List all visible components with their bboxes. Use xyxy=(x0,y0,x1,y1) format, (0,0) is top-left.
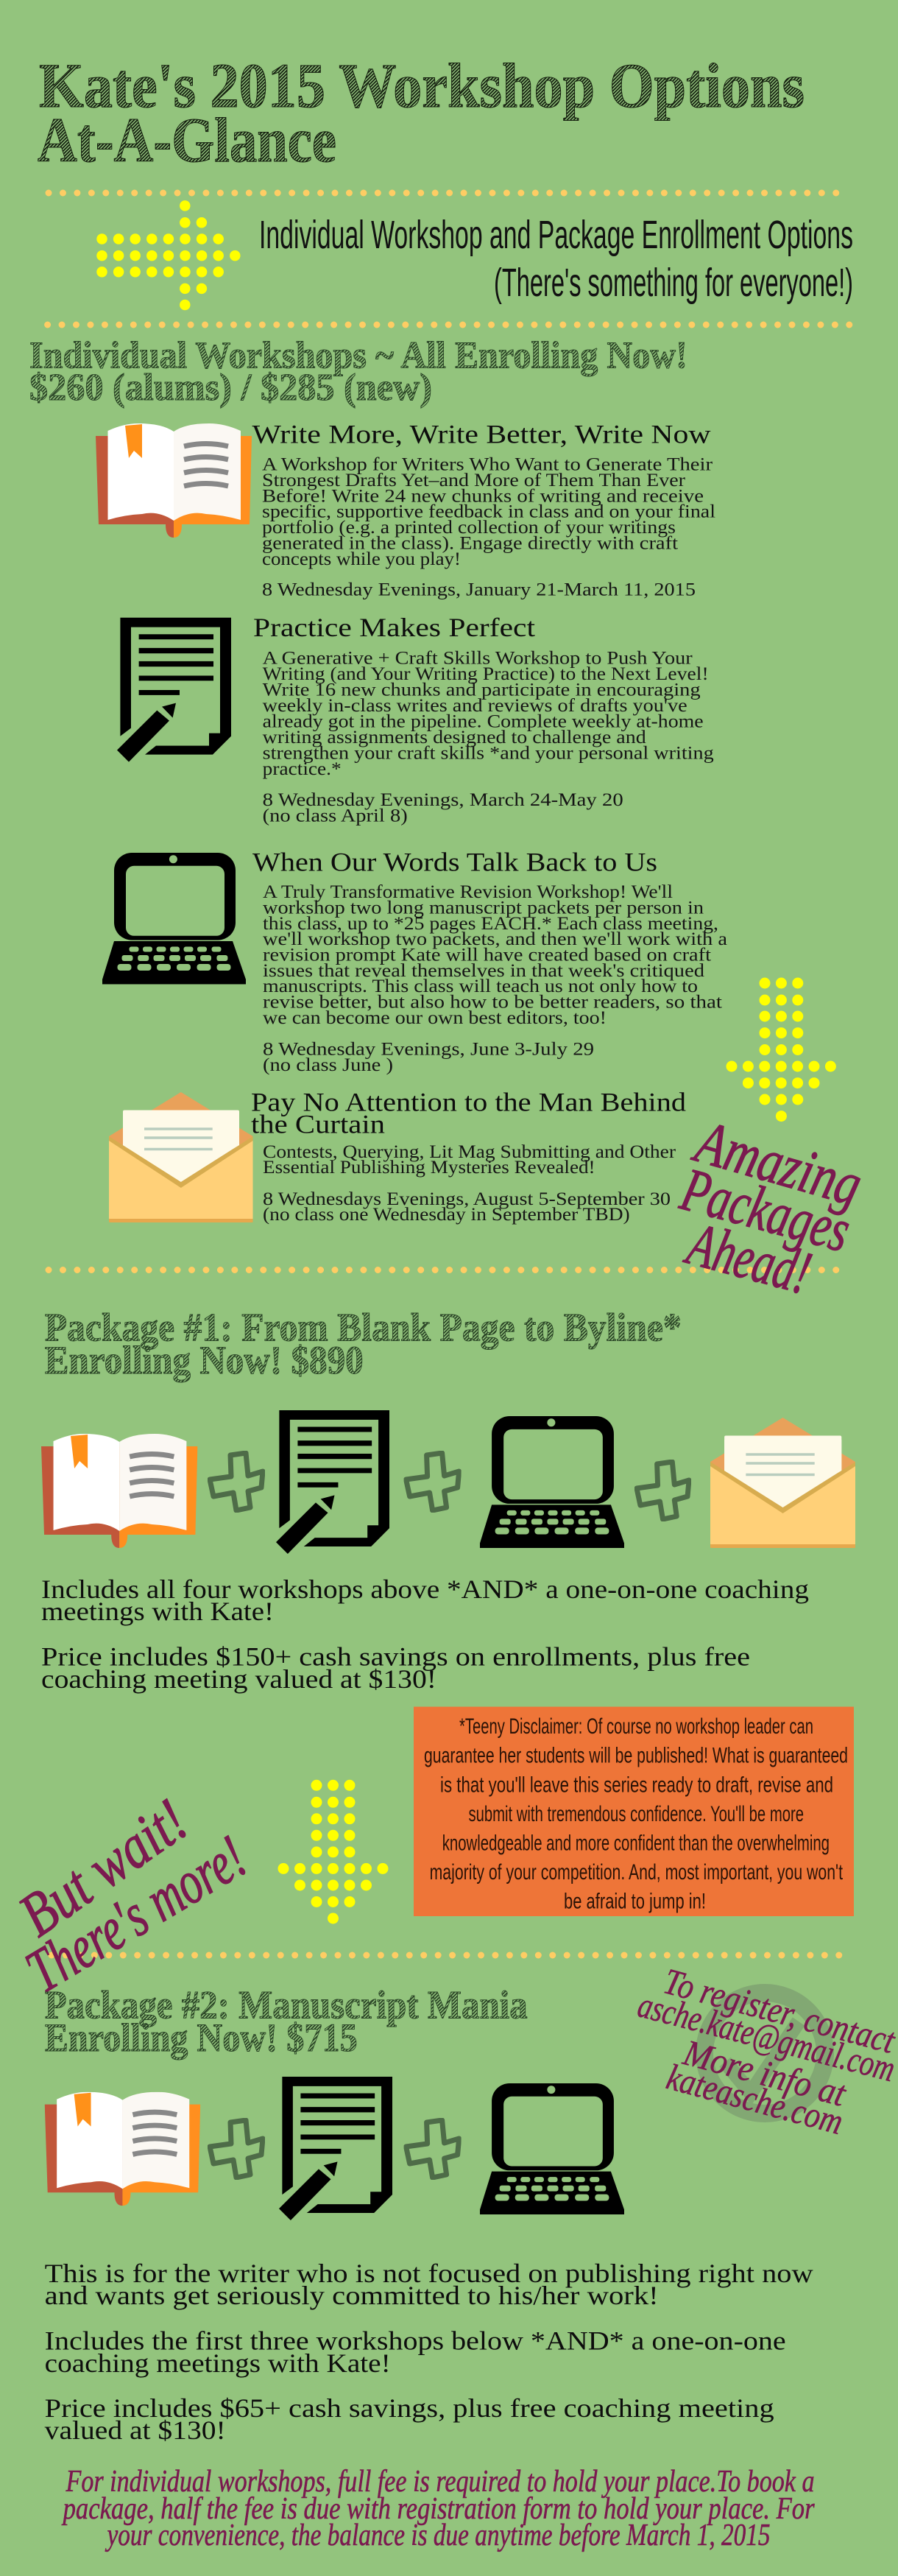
text: package 2 details: Price includes $65+ cash savings, plus free coaching meeting xyxy=(45,2393,774,2423)
text: package 1 details: Includes all four workshops above *AND* a one-on-one coaching xyxy=(41,1574,809,1604)
workshop 4 title: Pay No Attention to the Man Behind xyxy=(251,1087,686,1116)
icon: plus xyxy=(406,1453,459,1510)
workshop 2 description: Write 16 new chunks and participate in encouraging xyxy=(263,680,701,700)
callout: but wait there's more: There's more! xyxy=(15,1823,258,2006)
panel: workshop 4 xyxy=(109,1087,686,1225)
callout: registration contact xyxy=(634,1960,898,2142)
workshop 2 description xyxy=(263,649,714,779)
workshop 3 description: revise better, but also how to be better readers, so that xyxy=(263,993,722,1012)
panel: disclaimer xyxy=(414,1707,854,1916)
workshop 3 description: this class, up to *25 pages EACH.* Each class meeting, xyxy=(263,914,718,934)
heading: package 1 xyxy=(45,1305,682,1382)
callout: amazing packages ahead xyxy=(674,1107,869,1308)
text: package 1 details xyxy=(41,1574,809,1694)
text: package 2 details xyxy=(45,2259,813,2445)
workshop 1 description: A Workshop for Writers Who Want to Generate Their xyxy=(262,455,713,474)
workshop 3 dates: 8 Wednesday Evenings, June 3-July 29 xyxy=(263,1040,594,1060)
text: package 2 details: Includes the first three workshops below *AND* a one-on-one xyxy=(45,2326,786,2356)
heading: individual workshops xyxy=(29,334,687,409)
icon: document xyxy=(276,1410,389,1554)
icon: plus xyxy=(637,1462,689,1519)
heading: package 2: Package #2: Manuscript Mania xyxy=(45,1983,528,2027)
callout: amazing packages ahead: Ahead! xyxy=(679,1209,818,1308)
icon: book xyxy=(41,1434,197,1548)
icon: document with pencil xyxy=(117,618,231,762)
workshop 3 description: manuscripts. This class will teach us not only how to xyxy=(263,976,698,996)
subtitle xyxy=(259,213,853,305)
workshop 3 description: workshop two long manuscript packets per person in xyxy=(263,898,704,918)
icon: yellow dotted arrow down xyxy=(732,983,831,1116)
callout: but wait there's more: But wait! xyxy=(7,1786,200,1950)
text: package 2 details: coaching meetings with Kate! xyxy=(45,2348,391,2378)
workshop 3 description: revision prompt Kate will have created based on craft xyxy=(263,946,711,965)
title: Kate's 2015 Workshop Options xyxy=(39,50,805,121)
title: At-A-Glance xyxy=(38,105,336,175)
icon: laptop xyxy=(102,853,246,984)
icon: plus xyxy=(210,1453,263,1510)
text: package 1 details: meetings with Kate! xyxy=(41,1597,274,1626)
heading: package 1: Enrolling Now! $890 xyxy=(45,1338,364,1382)
icon: book xyxy=(45,2092,200,2206)
workshop 2 title: Practice Makes Perfect xyxy=(253,613,535,642)
heading: individual workshops: Individual Workshops ~ All Enrolling Now! xyxy=(29,334,687,377)
workshop 2 description: writing assignments designed to challenge and xyxy=(263,728,646,747)
workshop 1 title: Write More, Write Better, Write Now xyxy=(252,419,711,448)
disclaimer text xyxy=(424,1714,848,1914)
workshop 2 description: already got in the pipeline. Complete weekly at-home xyxy=(263,711,704,732)
workshop 3 description: we'll workshop two packets, and then we'll work with a xyxy=(263,929,727,949)
callout: registration contact: kateasche.com xyxy=(662,2056,847,2142)
icon: open book xyxy=(96,423,252,538)
workshop 2 description: strengthen your craft skills *and your personal writing xyxy=(263,743,714,763)
workshop 1 description: Strongest Drafts Yet–and More of Them Than Ever xyxy=(262,471,686,490)
workshop 3 dates xyxy=(263,1040,594,1075)
workshop 4 dates: (no class one Wednesday in September TBD) xyxy=(263,1205,630,1225)
workshop 2 dates: 8 Wednesday Evenings, March 24-May 20 xyxy=(263,790,623,810)
watermark: circled check xyxy=(704,1993,825,2114)
disclaimer text: be afraid to jump in! xyxy=(564,1890,706,1914)
workshop 1 description: Before! Write 24 new chunks of writing and receive xyxy=(262,486,704,506)
heading: package 2: Enrolling Now! $715 xyxy=(45,2016,358,2060)
panel: workshop 2 xyxy=(117,613,714,826)
workshop 3 description: A Truly Transformative Revision Workshop! We'll xyxy=(263,882,673,902)
panel: workshop 1 xyxy=(96,419,715,600)
footer note xyxy=(61,2465,815,2552)
callout: but wait there's more xyxy=(7,1786,258,2006)
panel: workshop 3 xyxy=(102,848,727,1075)
title xyxy=(38,50,805,175)
heading: package 2 xyxy=(45,1983,528,2060)
workshop 2 dates: (no class April 8) xyxy=(263,806,408,826)
workshop 2 description: A Generative + Craft Skills Workshop to Push Your xyxy=(263,649,693,669)
icon: yellow dotted arrow down 2 xyxy=(283,1785,383,1918)
workshop 2 dates xyxy=(263,790,623,826)
workshop 1 description xyxy=(262,455,715,569)
icon: envelope xyxy=(109,1092,253,1222)
workshop 2 description: Writing (and Your Writing Practice) to the Next Level! xyxy=(263,664,709,684)
workshop 3 title: When Our Words Talk Back to Us xyxy=(252,848,657,877)
workshop 4 description xyxy=(263,1142,676,1178)
heading: package 1: Package #1: From Blank Page to Byline* xyxy=(45,1305,682,1349)
icon: plus xyxy=(210,2120,263,2178)
text: package 2 details: valued at $130! xyxy=(45,2415,226,2445)
text: package 2 details: This is for the writer who is not focused on publishing right now xyxy=(45,2259,813,2288)
text: package 2 details: and wants get seriously committed to his/her work! xyxy=(45,2281,659,2310)
icon: laptop xyxy=(480,1416,624,1548)
workshop 1 description: concepts while you play! xyxy=(262,549,461,569)
icon: envelope xyxy=(710,1418,855,1548)
text: package 1 details: Price includes $150+ cash savings on enrollments, plus free xyxy=(41,1641,750,1671)
workshop 4 dates: 8 Wednesdays Evenings, August 5-September 30 xyxy=(263,1189,671,1209)
workshop 1 description: portfolio (e.g. a printed collection of your writings xyxy=(262,518,676,538)
icon: yellow dotted arrow right xyxy=(102,205,236,305)
workshop 3 description xyxy=(263,882,727,1028)
workshop 4 title xyxy=(251,1087,686,1139)
workshop 3 dates: (no class June ) xyxy=(263,1055,393,1075)
workshop 3 description: issues that reveal themselves in that week's critiqued xyxy=(263,961,705,981)
heading: individual workshops: $260 (alums) / $285 (new) xyxy=(29,367,432,409)
workshop 4 title: the Curtain xyxy=(251,1110,385,1139)
icon: laptop xyxy=(480,2083,624,2214)
icon: plus xyxy=(406,2120,459,2178)
icon: document xyxy=(279,2077,392,2220)
workshop 4 description: Contests, Querying, Lit Mag Submitting and Other xyxy=(263,1142,676,1162)
callout: registration contact: More info at xyxy=(679,2031,851,2114)
workshop 2 description: weekly in-class writes and reviews of drafts you've xyxy=(263,696,687,716)
workshop 1 description: generated in the class). Engage directly with craft xyxy=(262,534,678,554)
workshop 1 dates: 8 Wednesday Evenings, January 21-March 11, 2015 xyxy=(262,580,696,600)
workshop 4 dates xyxy=(263,1189,671,1225)
icon row: package 2 xyxy=(45,2077,624,2220)
text: package 1 details: coaching meeting valued at $130! xyxy=(41,1664,436,1694)
workshop 1 description: specific, supportive feedback in class and on your final xyxy=(262,502,715,522)
icon row: package 1 xyxy=(41,1410,855,1554)
workshop 3 description: we can become our own best editors, too! xyxy=(263,1008,607,1028)
workshop 4 description: Essential Publishing Mysteries Revealed! xyxy=(263,1158,595,1178)
workshop 2 description: practice.* xyxy=(263,759,342,779)
